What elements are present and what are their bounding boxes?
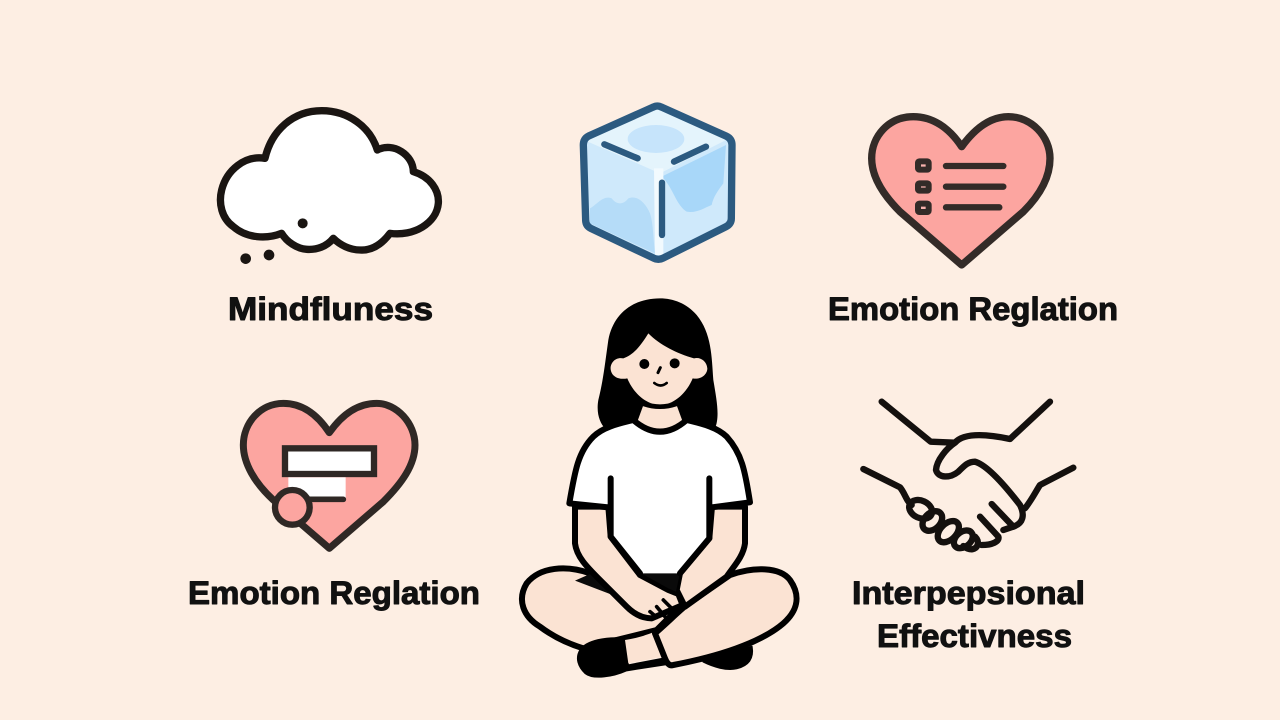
- right arm: [677, 507, 745, 607]
- heading: Emotion Reglation (bottom left): Emotion Reglation: [188, 575, 480, 611]
- sock: [625, 632, 664, 663]
- heading: Emotion Reglation (top right): Emotion Reglation: [828, 291, 1118, 327]
- icon: handshake: [863, 402, 1073, 552]
- figure: seated person: [522, 298, 797, 677]
- heading: Mindfluness: Mindfluness: [228, 291, 433, 327]
- right shoe: [703, 647, 752, 669]
- facial features: [639, 358, 680, 407]
- icon: thought cloud: [220, 111, 438, 264]
- shirt outline: [569, 420, 750, 573]
- face: [611, 333, 707, 405]
- heading: Interpepsional Effectivness: Effectivness: [877, 618, 1072, 654]
- shirt: [569, 420, 750, 573]
- shorts: [575, 573, 744, 607]
- fingers: [650, 600, 675, 617]
- heading: Interpepsional Effectivness: [852, 575, 1085, 654]
- left arm and hand: [575, 507, 683, 618]
- left thigh: [522, 568, 680, 648]
- icon: heart with checklist: [872, 117, 1050, 265]
- heading: Interpepsional Effectivness: Interpepsional: [852, 575, 1085, 611]
- right leg: [655, 569, 797, 665]
- left shoe: [578, 638, 670, 677]
- neck: [637, 403, 683, 433]
- hair: [598, 298, 718, 428]
- icon: ice cube: [583, 106, 732, 259]
- shorts between hand and shirt: [640, 573, 680, 592]
- icon: heart with bars and circle: [243, 403, 415, 548]
